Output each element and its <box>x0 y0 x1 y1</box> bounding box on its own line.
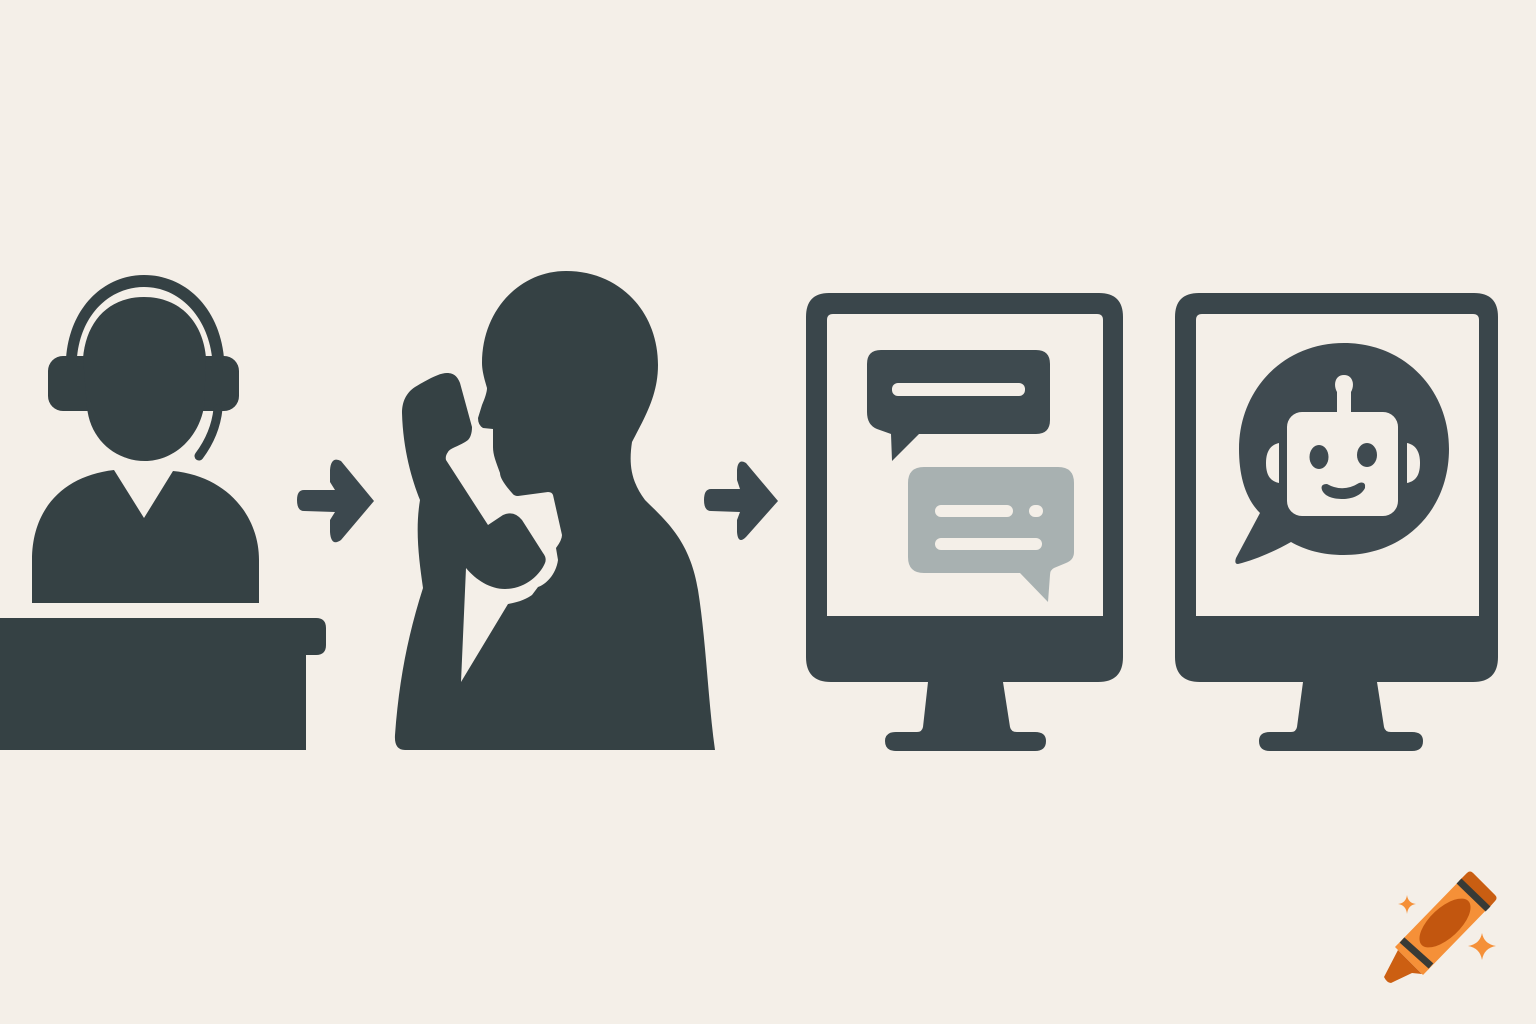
monitor screen <box>827 314 1103 616</box>
robot eyes <box>1310 445 1328 469</box>
robot head <box>1287 412 1398 516</box>
monitor body <box>806 293 1123 751</box>
microphone boom <box>199 409 218 456</box>
crayon cap <box>1459 872 1496 909</box>
icon: monitor with chatbot <box>1175 293 1498 751</box>
dark bubble text line <box>892 383 1025 396</box>
ear cups <box>48 356 108 411</box>
agent head <box>83 297 206 461</box>
desk <box>0 618 326 750</box>
crayon stripes <box>1402 881 1488 966</box>
arrow: agent to caller <box>297 460 374 542</box>
icon: call center agent with headset at desk <box>0 275 326 750</box>
icon: monitor with chat bubbles <box>806 293 1123 751</box>
monitor body <box>1175 293 1498 751</box>
crayon label oval <box>1411 890 1479 956</box>
crayon tip <box>1384 950 1422 983</box>
crayon body <box>1395 872 1496 975</box>
sparkle bottom right <box>1468 933 1496 960</box>
robot antenna <box>1335 375 1353 414</box>
icon: orange crayon logo <box>1384 872 1496 983</box>
robot smile <box>1322 483 1365 499</box>
icon: person on telephone <box>395 271 715 750</box>
robot ears <box>1266 443 1279 483</box>
dark chat bubble <box>867 350 1050 461</box>
torso <box>32 470 259 603</box>
monitor screen <box>1196 314 1479 616</box>
sparkle top left <box>1398 895 1416 914</box>
robot speech bubble <box>1235 343 1449 564</box>
arrow: caller to chat screen <box>704 462 778 540</box>
headset band <box>66 275 224 358</box>
grey bubble text lines <box>935 505 1013 517</box>
grey chat bubble <box>908 467 1074 602</box>
